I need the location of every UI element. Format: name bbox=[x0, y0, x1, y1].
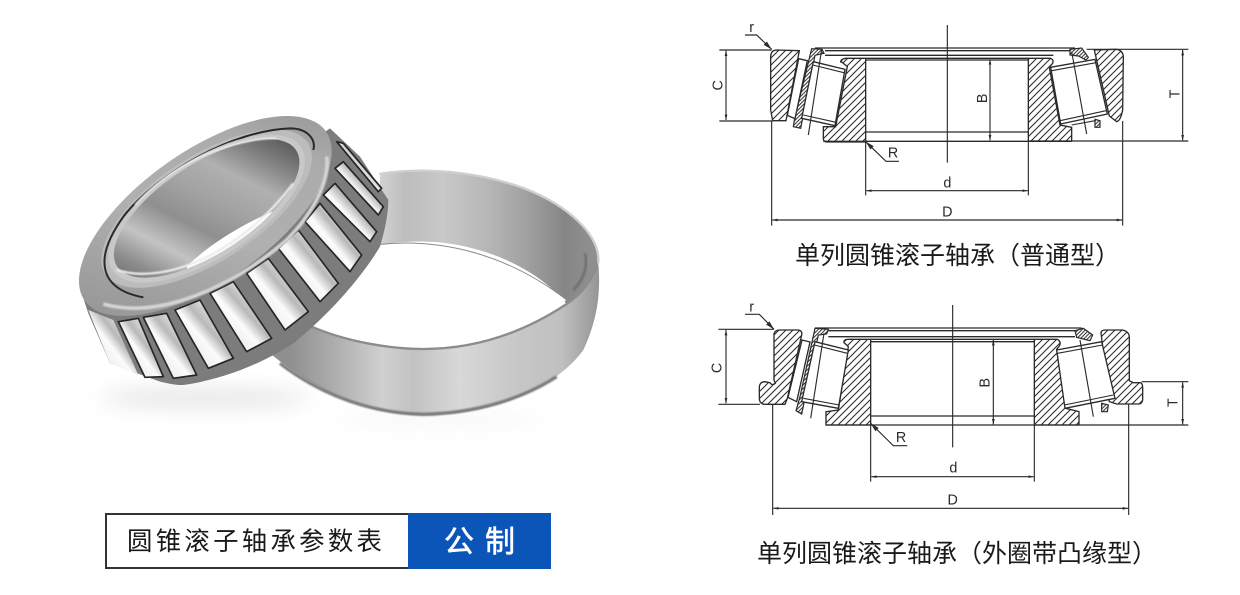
inner cone with rollers bbox=[79, 116, 388, 385]
inner ring section right bbox=[1028, 58, 1072, 141]
labels: r bbox=[749, 20, 754, 36]
outer ring section right with flange bbox=[1101, 330, 1143, 404]
inner ring section left bbox=[823, 58, 866, 142]
dimension arrows bbox=[726, 50, 1183, 220]
labels: B bbox=[975, 94, 991, 103]
top and bore lines bbox=[815, 48, 1075, 141]
dimension arrows bbox=[726, 330, 1183, 508]
R leader bbox=[866, 142, 899, 161]
diagram: standard type bbox=[711, 20, 1188, 226]
rollers bbox=[88, 142, 383, 378]
roller right bbox=[1051, 59, 1107, 124]
blue tag bbox=[408, 513, 551, 569]
cage right bbox=[1075, 328, 1093, 341]
labels: T bbox=[1166, 398, 1182, 407]
dark groove arc bbox=[104, 128, 314, 297]
labels: C bbox=[710, 363, 726, 373]
small cage part bbox=[788, 340, 810, 402]
outer ring cup bbox=[267, 170, 599, 416]
inner ring section right bbox=[1034, 339, 1079, 425]
outer ring section right bbox=[1094, 49, 1123, 122]
roller left bbox=[802, 62, 845, 126]
cone body bbox=[81, 128, 388, 385]
labels: R bbox=[888, 146, 898, 162]
r leader bbox=[745, 35, 772, 49]
labels: B bbox=[977, 378, 993, 387]
cage left bbox=[793, 49, 824, 128]
tag text: 公制 bbox=[444, 526, 526, 559]
soft floor shadow bbox=[100, 388, 550, 424]
see-through opening bbox=[186, 212, 273, 268]
diagram: flanged type bbox=[710, 299, 1188, 515]
box text: 圆锥滚子轴承参数表 bbox=[127, 528, 385, 556]
labels: R bbox=[896, 430, 906, 446]
cage right bbox=[1070, 48, 1088, 60]
labels: d bbox=[949, 460, 957, 476]
roller right bbox=[1057, 342, 1115, 408]
inner ring section left bbox=[826, 339, 871, 425]
cone face ring bbox=[47, 78, 363, 354]
outer ring section left bbox=[771, 50, 799, 121]
labels bbox=[711, 20, 1183, 221]
labels: C bbox=[711, 80, 727, 91]
bore bbox=[93, 112, 321, 304]
caption: flanged type: 单列圆锥滚子轴承（外圈带凸缘型） bbox=[757, 540, 1157, 568]
roller left bbox=[802, 342, 848, 408]
extension and centre lines bbox=[718, 305, 1188, 515]
labels: D bbox=[947, 493, 958, 509]
labels: T bbox=[1167, 89, 1183, 98]
top and bore lines bbox=[815, 328, 1082, 425]
labels: r bbox=[749, 299, 754, 315]
labels bbox=[710, 299, 1182, 509]
cage left bbox=[796, 328, 828, 414]
r leader bbox=[745, 314, 774, 329]
bearing photo bbox=[79, 116, 600, 417]
outer ring section left with flange bbox=[759, 330, 802, 404]
title box: parameter table bbox=[106, 513, 551, 569]
R leader bbox=[871, 423, 907, 446]
extension and centre lines bbox=[719, 25, 1188, 226]
labels: d bbox=[943, 176, 951, 192]
caption: standard type: 单列圆锥滚子轴承（普通型） bbox=[795, 242, 1120, 270]
small cage parts bbox=[787, 59, 807, 119]
label box bbox=[106, 514, 409, 568]
labels: D bbox=[942, 205, 953, 221]
